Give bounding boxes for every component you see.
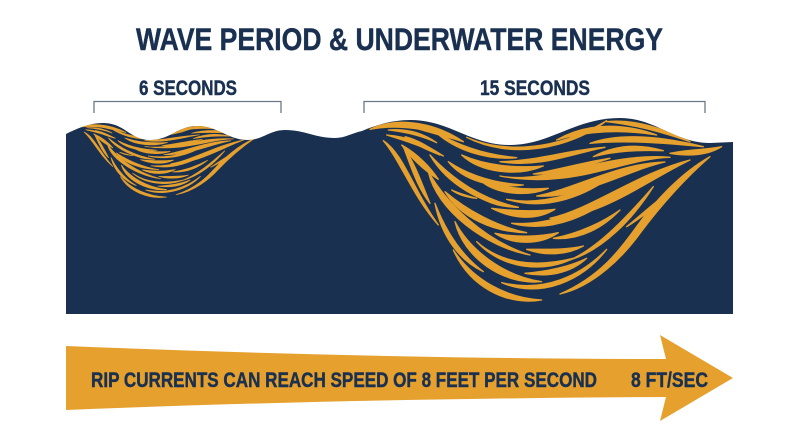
navy water body with wave surface (66, 118, 733, 314)
label: 6 seconds: 6 SECONDS (139, 77, 237, 100)
label: 15 seconds: 15 SECONDS (480, 77, 590, 100)
title: WAVE PERIOD & UNDERWATER ENERGY (136, 21, 663, 57)
energy strands: 15 second wave (370, 121, 722, 301)
bracket: 6 seconds (94, 102, 281, 113)
infographic canvas (66, 28, 733, 421)
arrow text: 8 ft/sec: 8 FT/SEC (631, 368, 708, 392)
bracket: 15 seconds (364, 102, 705, 113)
speed arrow (66, 335, 733, 421)
arrow text: rip current speed: RIP CURRENTS CAN REACH SPEED OF 8 FEET PER SECOND (91, 368, 597, 392)
energy strands: 6 second wave (77, 124, 260, 197)
